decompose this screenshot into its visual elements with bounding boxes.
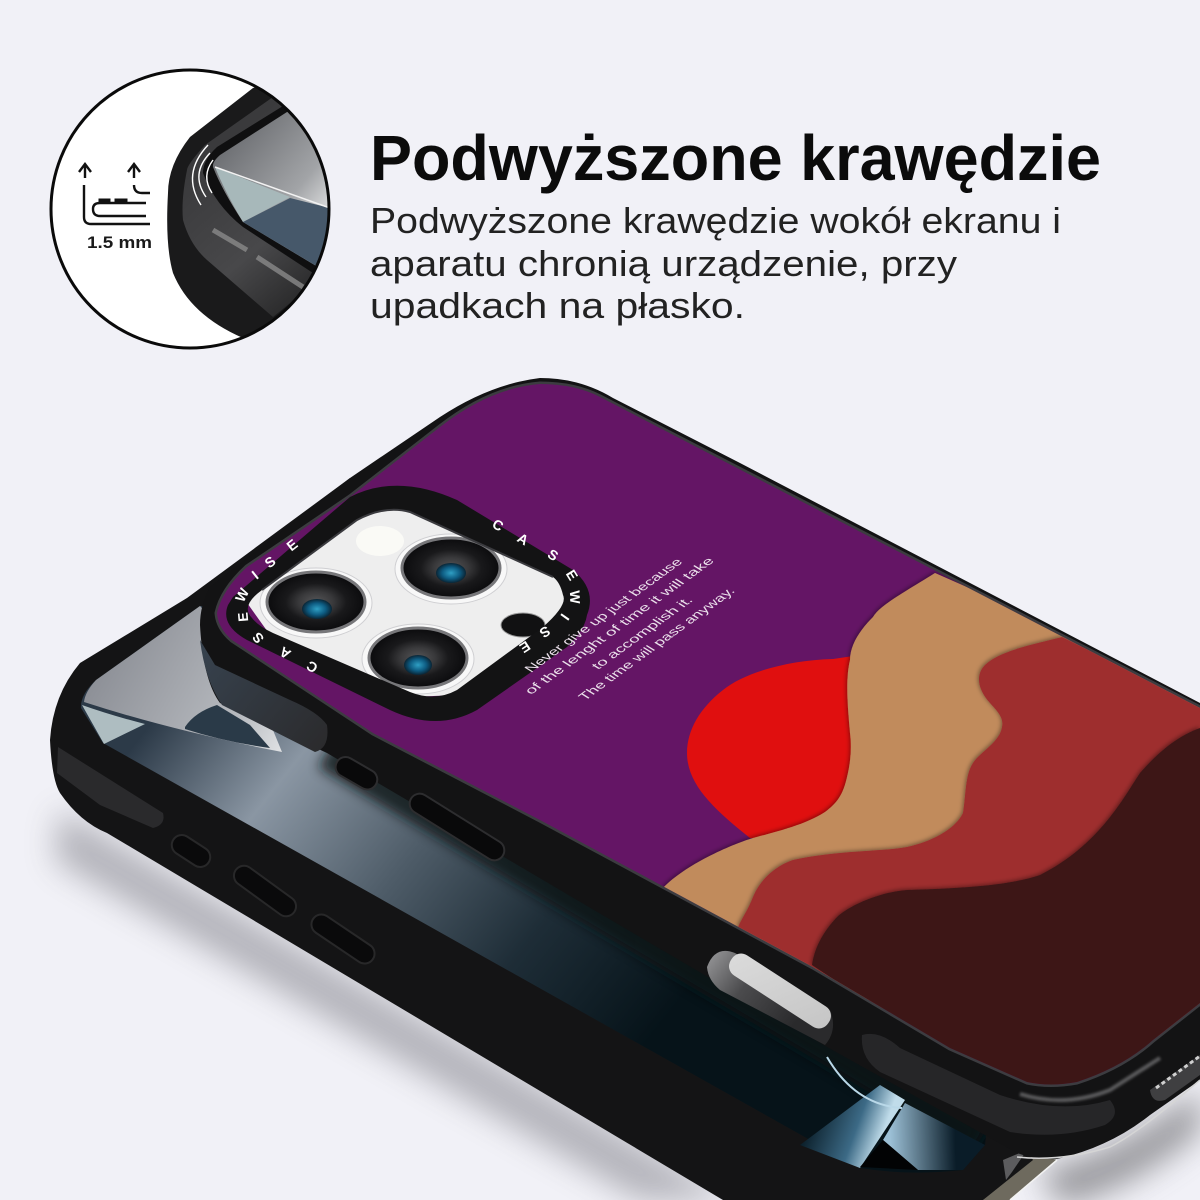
quote printed on case: of the lenght of time it will take: [521, 555, 717, 697]
camera bump: [226, 486, 590, 721]
heading: Podwyższone krawędzie: [370, 122, 1101, 194]
panel rim: [217, 384, 1200, 1084]
rear phone in black case: [50, 478, 1057, 1200]
quote printed on case: The time will pass anyway.: [575, 585, 738, 703]
front carbon patch by camera: [200, 640, 328, 752]
white wallpaper line: [215, 167, 330, 208]
screen glow left of cross: [800, 1085, 905, 1168]
circular detail callout: [51, 60, 340, 360]
wallpaper dark shape: [185, 705, 270, 748]
quote printed on case: [521, 555, 738, 703]
body text: upadkach na płasko.: [370, 285, 745, 326]
screen glass: [212, 112, 328, 266]
CASEWISE ring lettering: W: [232, 585, 252, 605]
CASEWISE ring lettering: S: [249, 629, 267, 647]
circle outline: [51, 70, 329, 348]
pale wallpaper band: [215, 167, 290, 222]
tan wave: [663, 573, 1200, 1000]
case bottom rim light: [1017, 1080, 1200, 1158]
screen glow right of cross: [883, 1103, 985, 1170]
CASEWISE ring lettering: A: [276, 644, 293, 663]
case outer shape: [167, 88, 292, 337]
back panel artwork: [200, 370, 1200, 1100]
CASEWISE ring lettering: [232, 515, 583, 677]
CASEWISE ring lettering: C: [490, 515, 506, 534]
bottom edge highlight: [1020, 1058, 1160, 1100]
black wedge in wallpaper: [860, 1140, 918, 1170]
CASEWISE ring lettering: S: [537, 623, 553, 641]
zoomed case corner: [167, 88, 328, 337]
speaker holes: [1156, 1056, 1200, 1088]
front phone in black case: [200, 370, 1200, 1159]
rear volume down button: [308, 911, 378, 967]
purple panel: [200, 370, 1200, 1100]
CASEWISE ring lettering: E: [517, 638, 533, 656]
rear screen: [81, 606, 1000, 1173]
CASEWISE ring lettering: C: [303, 658, 320, 677]
screen wallpaper, top left: [84, 606, 282, 752]
raised edge arcs: [192, 145, 213, 205]
CASEWISE ring lettering: I: [557, 611, 573, 623]
case translucent bevel: [182, 98, 312, 317]
quote printed on case: Never give up just because: [521, 556, 686, 675]
dark wallpaper: [243, 198, 328, 266]
case inner black rim: [203, 106, 316, 272]
quote printed on case: to accomplish it.: [588, 594, 696, 672]
wallpaper pale band: [82, 705, 145, 744]
camera flash: [356, 526, 404, 556]
silver port: [725, 949, 835, 1033]
CASEWISE ring lettering: E: [235, 612, 251, 622]
lens left: [260, 568, 372, 638]
shadow under front phone: [1040, 1090, 1200, 1200]
rear case frame: [50, 478, 1033, 1200]
rear power button: [168, 831, 214, 871]
rear volume up button: [230, 862, 300, 920]
CASEWISE ring lettering: E: [283, 536, 301, 554]
lens bottom: [362, 624, 474, 694]
circle fill: [51, 70, 329, 348]
front case body: [200, 378, 1200, 1159]
1.5 mm label: 1.5 mm: [87, 233, 152, 252]
camera ring: [226, 486, 590, 721]
CASEWISE ring lettering: I: [248, 567, 261, 582]
case edge highlight: [213, 230, 303, 287]
shadow under rear phone: [55, 810, 735, 1200]
CASEWISE ring lettering: A: [515, 529, 531, 548]
rear carbon corner patch: [57, 747, 164, 828]
body text: [370, 200, 1061, 326]
rear strip white edge: [1010, 1160, 1057, 1200]
dark maroon wave: [812, 728, 1200, 1090]
CASEWISE ring lettering: E: [563, 567, 581, 583]
sensor hole: [501, 613, 545, 637]
glow curve: [827, 1057, 902, 1108]
front carbon patch at bottom corner: [862, 1034, 1115, 1135]
CASEWISE ring lettering: S: [261, 553, 279, 571]
speaker cut-out: [1150, 1055, 1200, 1101]
red sun: [687, 655, 860, 838]
ring inner wall shade: [262, 510, 553, 590]
raised lip icon: [79, 164, 150, 224]
port surround: [707, 951, 833, 1045]
CASEWISE ring lettering: W: [567, 590, 583, 605]
rear bottom port: [1003, 1150, 1027, 1180]
CASEWISE ring lettering: S: [545, 546, 561, 564]
front mute switch: [332, 753, 381, 793]
body text: aparatu chronią urządzenie, przy: [370, 243, 957, 284]
body text: Podwyższone krawędzie wokół ekranu i: [370, 200, 1061, 241]
red wave: [738, 637, 1200, 1040]
rear olive back strip: [983, 1150, 1057, 1200]
front side button: [406, 790, 508, 864]
lens top: [395, 534, 507, 604]
camera module glass: [245, 505, 570, 697]
front phone shadow on screen: [313, 750, 674, 972]
